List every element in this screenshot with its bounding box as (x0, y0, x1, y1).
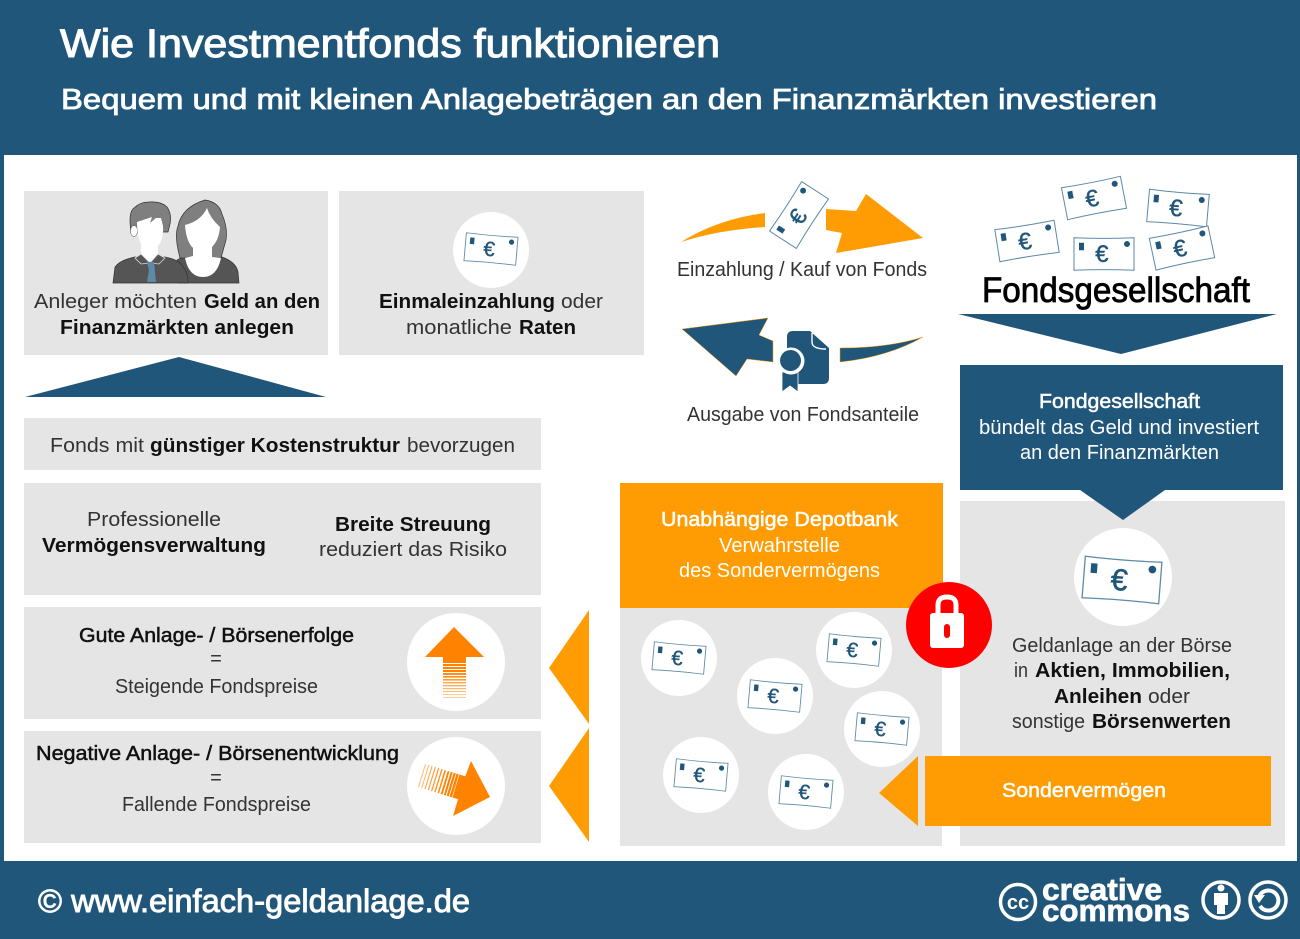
panel: Geldanlage: oder (1148, 686, 1190, 708)
icon: arrow falling (407, 737, 505, 835)
panel: Sondervermögen notes (620, 608, 942, 846)
icon: banknotes group: € (1083, 185, 1101, 214)
icon: investors (113, 200, 239, 283)
panel: Einmaleinzahlung: oder (561, 291, 603, 313)
panel: Geldanlage (960, 501, 1285, 846)
icon: banknote tilted: € (783, 204, 812, 229)
panel: Depotbank (620, 483, 943, 608)
panel: Sondervermögen notes: € (766, 684, 780, 708)
panel: Fondgesellschaft (960, 365, 1283, 520)
label: Ausgabe: Ausgabe von Fondsanteile (687, 404, 919, 426)
panel: Einmaleinzahlung: Raten (519, 317, 576, 339)
icon: creative commons logo: commons (1042, 893, 1190, 928)
icon: banknotes group: € (1171, 234, 1189, 264)
panel: Geldanlage: Anleihen (1054, 686, 1142, 708)
panel: Depotbank: des Sondervermögens (679, 560, 880, 582)
icon: banknote tilted (770, 182, 828, 248)
panel: Einmaleinzahlung (339, 191, 644, 355)
icon: lock (906, 582, 992, 668)
icon: banknote large: € (1109, 563, 1129, 598)
panel: Sondervermögen notes: € (692, 763, 706, 787)
panel: Gute Anlage: Steigende Fondspreise (115, 676, 318, 698)
panel: Anleger: Anleger möchten (34, 291, 197, 313)
panel: Einmaleinzahlung: Einmaleinzahlung (379, 291, 555, 313)
footer URL: © www.einfach-geldanlage.de (38, 883, 470, 919)
panel: Gute Anlage (24, 607, 541, 719)
panel: Negative Anlage: = (210, 767, 222, 789)
panel: Sondervermögen notes: € (797, 780, 811, 804)
panel: Geldanlage: sonstige (1012, 711, 1085, 733)
panel: Vermögensverwaltung und Streuung: Professionelle (87, 509, 221, 531)
panel: Kostenstruktur: Fonds mit (50, 435, 144, 457)
panel: Fondgesellschaft: bündelt das Geld und investiert (979, 417, 1259, 439)
icon: banknotes group: € (1016, 228, 1034, 256)
panel: Vermögensverwaltung und Streuung: reduziert das Risiko (319, 539, 507, 561)
panel: Geldanlage: Geldanlage an der Börse (1012, 635, 1232, 657)
panel: Fondgesellschaft: Fondgesellschaft (1039, 391, 1200, 413)
icon: creative commons logo (1000, 872, 1286, 928)
panel: Negative Anlage: Fallende Fondspreise (122, 794, 311, 816)
panel: Fondgesellschaft: an den Finanzmärkten (1020, 442, 1219, 464)
panel: Gute Anlage: Gute Anlage- / Börsenerfolge (79, 625, 354, 647)
icon: arrow up (407, 613, 505, 711)
panel: Anleger: Geld an den (204, 291, 320, 313)
arrow: Ausgabe (682, 318, 923, 392)
subtitle: Bequem und mit kleinen Anlagebeträgen an den Finanzmärkten investieren (61, 84, 1157, 116)
panel: Anleger: Finanzmärkten anlegen (60, 317, 294, 339)
panel: Kostenstruktur: günstiger Kostenstruktur (150, 435, 400, 457)
title: Wie Investmentfonds funktionieren (60, 22, 720, 66)
icon: creative commons logo: creative (1042, 872, 1162, 907)
panel: Depotbank: Unabhängige Depotbank (661, 509, 899, 531)
panel: Gute Anlage: = (210, 648, 222, 670)
icon: banknote in circle: € (482, 237, 496, 261)
panel: Negative Anlage: Negative Anlage- / Börsenentwicklung (36, 743, 399, 765)
label: Einzahlung: Einzahlung / Kauf von Fonds (677, 259, 927, 281)
icon: banknote large (1074, 528, 1172, 626)
panel: Sondervermögen notes: € (845, 638, 859, 662)
icon: banknotes group (995, 176, 1215, 270)
arrow: orange triangle upper (549, 610, 589, 724)
arrow: orange triangle lower (549, 728, 589, 842)
panel: Sondervermögen (925, 756, 1271, 826)
panel: Sondervermögen notes: € (670, 646, 684, 670)
panel: Kostenstruktur: bevorzugen (407, 435, 515, 457)
panel: Geldanlage: in (1014, 660, 1028, 682)
panel: Anleger (24, 191, 328, 355)
arrow: Einzahlung (681, 182, 923, 253)
panel: Geldanlage: Börsenwerten (1092, 711, 1231, 733)
icon: banknotes group: € (1168, 194, 1184, 222)
panel: Vermögensverwaltung und Streuung: Breite Streuung (335, 514, 491, 536)
icon: banknotes group: € (1095, 241, 1108, 268)
panel: Einmaleinzahlung: monatliche (406, 317, 512, 339)
panel: Kostenstruktur (24, 418, 541, 470)
panel: Depotbank: Verwahrstelle (719, 535, 840, 557)
panel: Sondervermögen: Sondervermögen (1002, 780, 1166, 802)
panel: Vermögensverwaltung und Streuung: Vermögensverwaltung (42, 535, 266, 557)
panel: Vermögensverwaltung und Streuung (24, 483, 541, 595)
panel: Geldanlage: Aktien, Immobilien, (1035, 660, 1230, 682)
icon: certificate document (778, 331, 829, 392)
panel: Negative Anlage (24, 731, 541, 843)
icon: banknote in circle (453, 212, 529, 288)
heading: Fondsgesellschaft: Fondsgesellschaft (982, 271, 1250, 310)
arrow: up triangle to investors (25, 357, 326, 397)
arrow: down triangle (958, 314, 1277, 354)
arrow: Sondervermögen pointer (879, 756, 918, 826)
header (60, 22, 1157, 116)
icon: creative commons logo: cc (1007, 892, 1029, 914)
panel: Sondervermögen notes: € (873, 717, 887, 741)
